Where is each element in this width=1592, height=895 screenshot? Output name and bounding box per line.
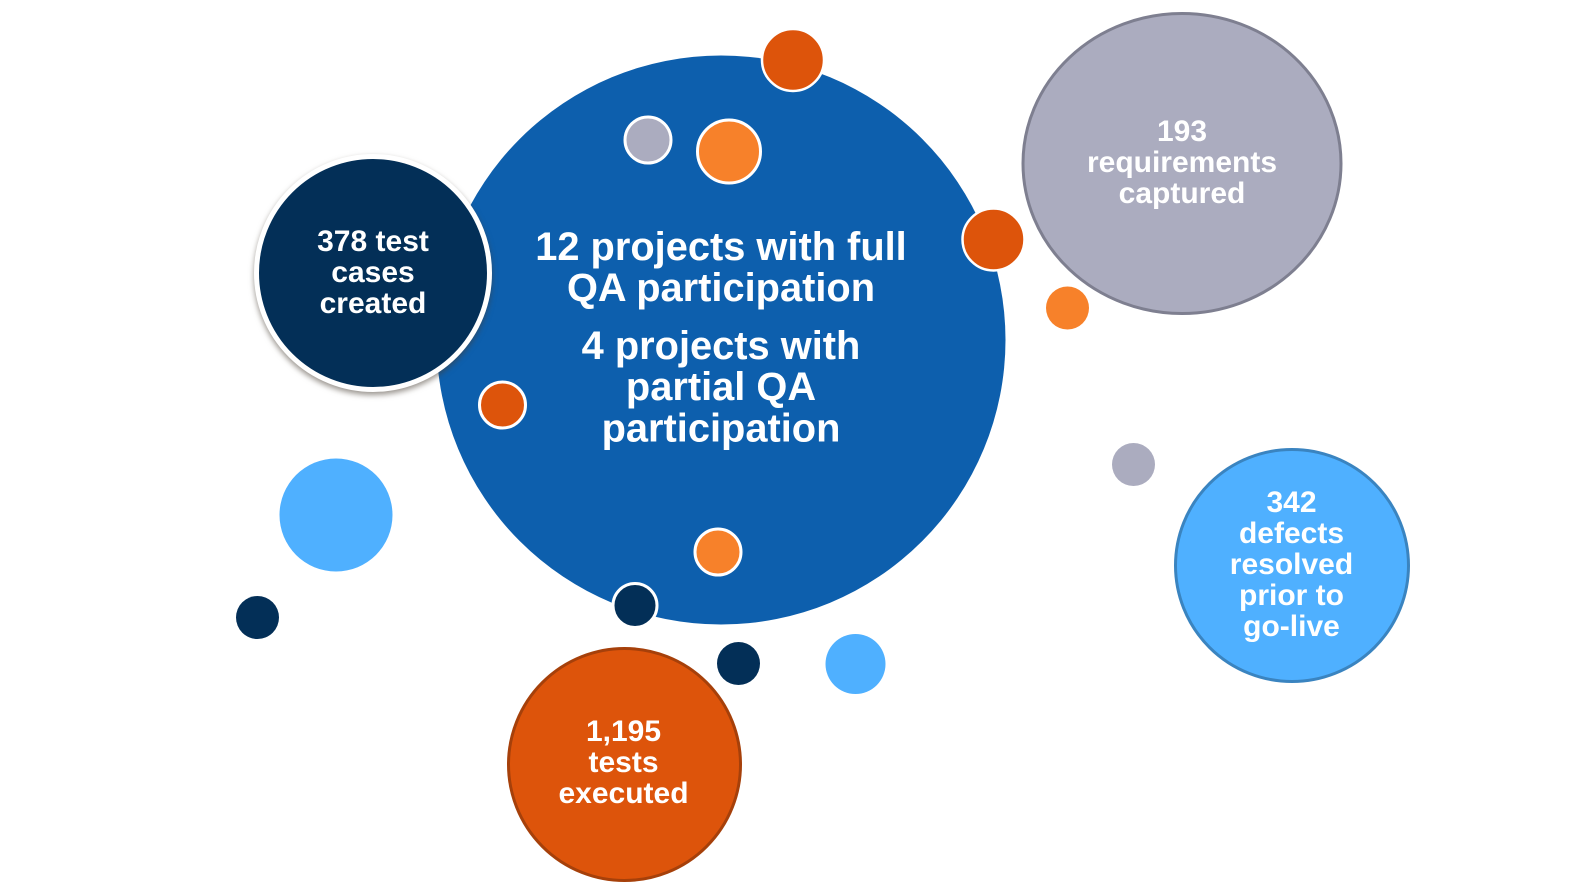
panel: main circle with project participation: [436, 56, 1006, 624]
text block: partial QA participation: participation: [602, 406, 840, 450]
panel: 378 test cases created: created: [320, 287, 426, 320]
icon: large light blue dot: [280, 458, 392, 572]
panel: 378 test cases created: 378 test: [317, 225, 429, 258]
text block: partial QA participation: 4 projects with: [582, 324, 860, 368]
icon: top orange dot on main circle: [762, 29, 824, 91]
panel: 342 defects resolved prior to go-live: [1176, 450, 1408, 682]
text block: partial QA participation: partial QA: [626, 365, 816, 409]
panel: 342 defects resolved prior to go-live: 342: [1266, 486, 1317, 519]
icon: free grey dot: [1112, 443, 1155, 486]
icon: left orange dot on main circle: [480, 382, 526, 428]
panel: 1,195 tests executed: [508, 648, 740, 880]
icon: small grey dot on main circle: [625, 117, 671, 163]
panel: 342 defects resolved prior to go-live: prior to: [1239, 579, 1344, 612]
heading: full QA participation: QA participation: [567, 266, 875, 310]
icon: navy dot on main circle edge: [613, 584, 657, 628]
icon: light blue dot lower centre: [826, 634, 886, 694]
panel: 342 defects resolved prior to go-live: resolved: [1230, 548, 1353, 581]
icon: lower bright orange dot on main circle: [695, 529, 741, 575]
panel: 1,195 tests executed: 1,195: [586, 715, 661, 748]
panel: 193 requirements captured: requirements: [1087, 146, 1277, 179]
panel: 193 requirements captured: [1023, 14, 1341, 314]
panel: 1,195 tests executed: tests: [588, 746, 659, 779]
panel: 193 requirements captured: captured: [1119, 177, 1245, 210]
heading: full QA participation: 12 projects with full: [535, 225, 907, 269]
icon: free bright orange dot: [1046, 286, 1089, 330]
panel: 193 requirements captured: 193: [1157, 115, 1207, 148]
icon: navy dot lower left: [236, 596, 279, 639]
panel: 342 defects resolved prior to go-live: defects: [1239, 517, 1344, 550]
icon: bright orange dot on main circle: [698, 120, 760, 183]
panel: 378 test cases created: cases: [331, 256, 415, 289]
panel: 342 defects resolved prior to go-live: go-live: [1243, 610, 1340, 643]
icon: right orange dot on main circle: [962, 208, 1024, 270]
panel: 1,195 tests executed: executed: [558, 777, 689, 810]
panel: 378 test cases created: [256, 156, 490, 390]
icon: navy dot lower centre: [717, 642, 760, 685]
